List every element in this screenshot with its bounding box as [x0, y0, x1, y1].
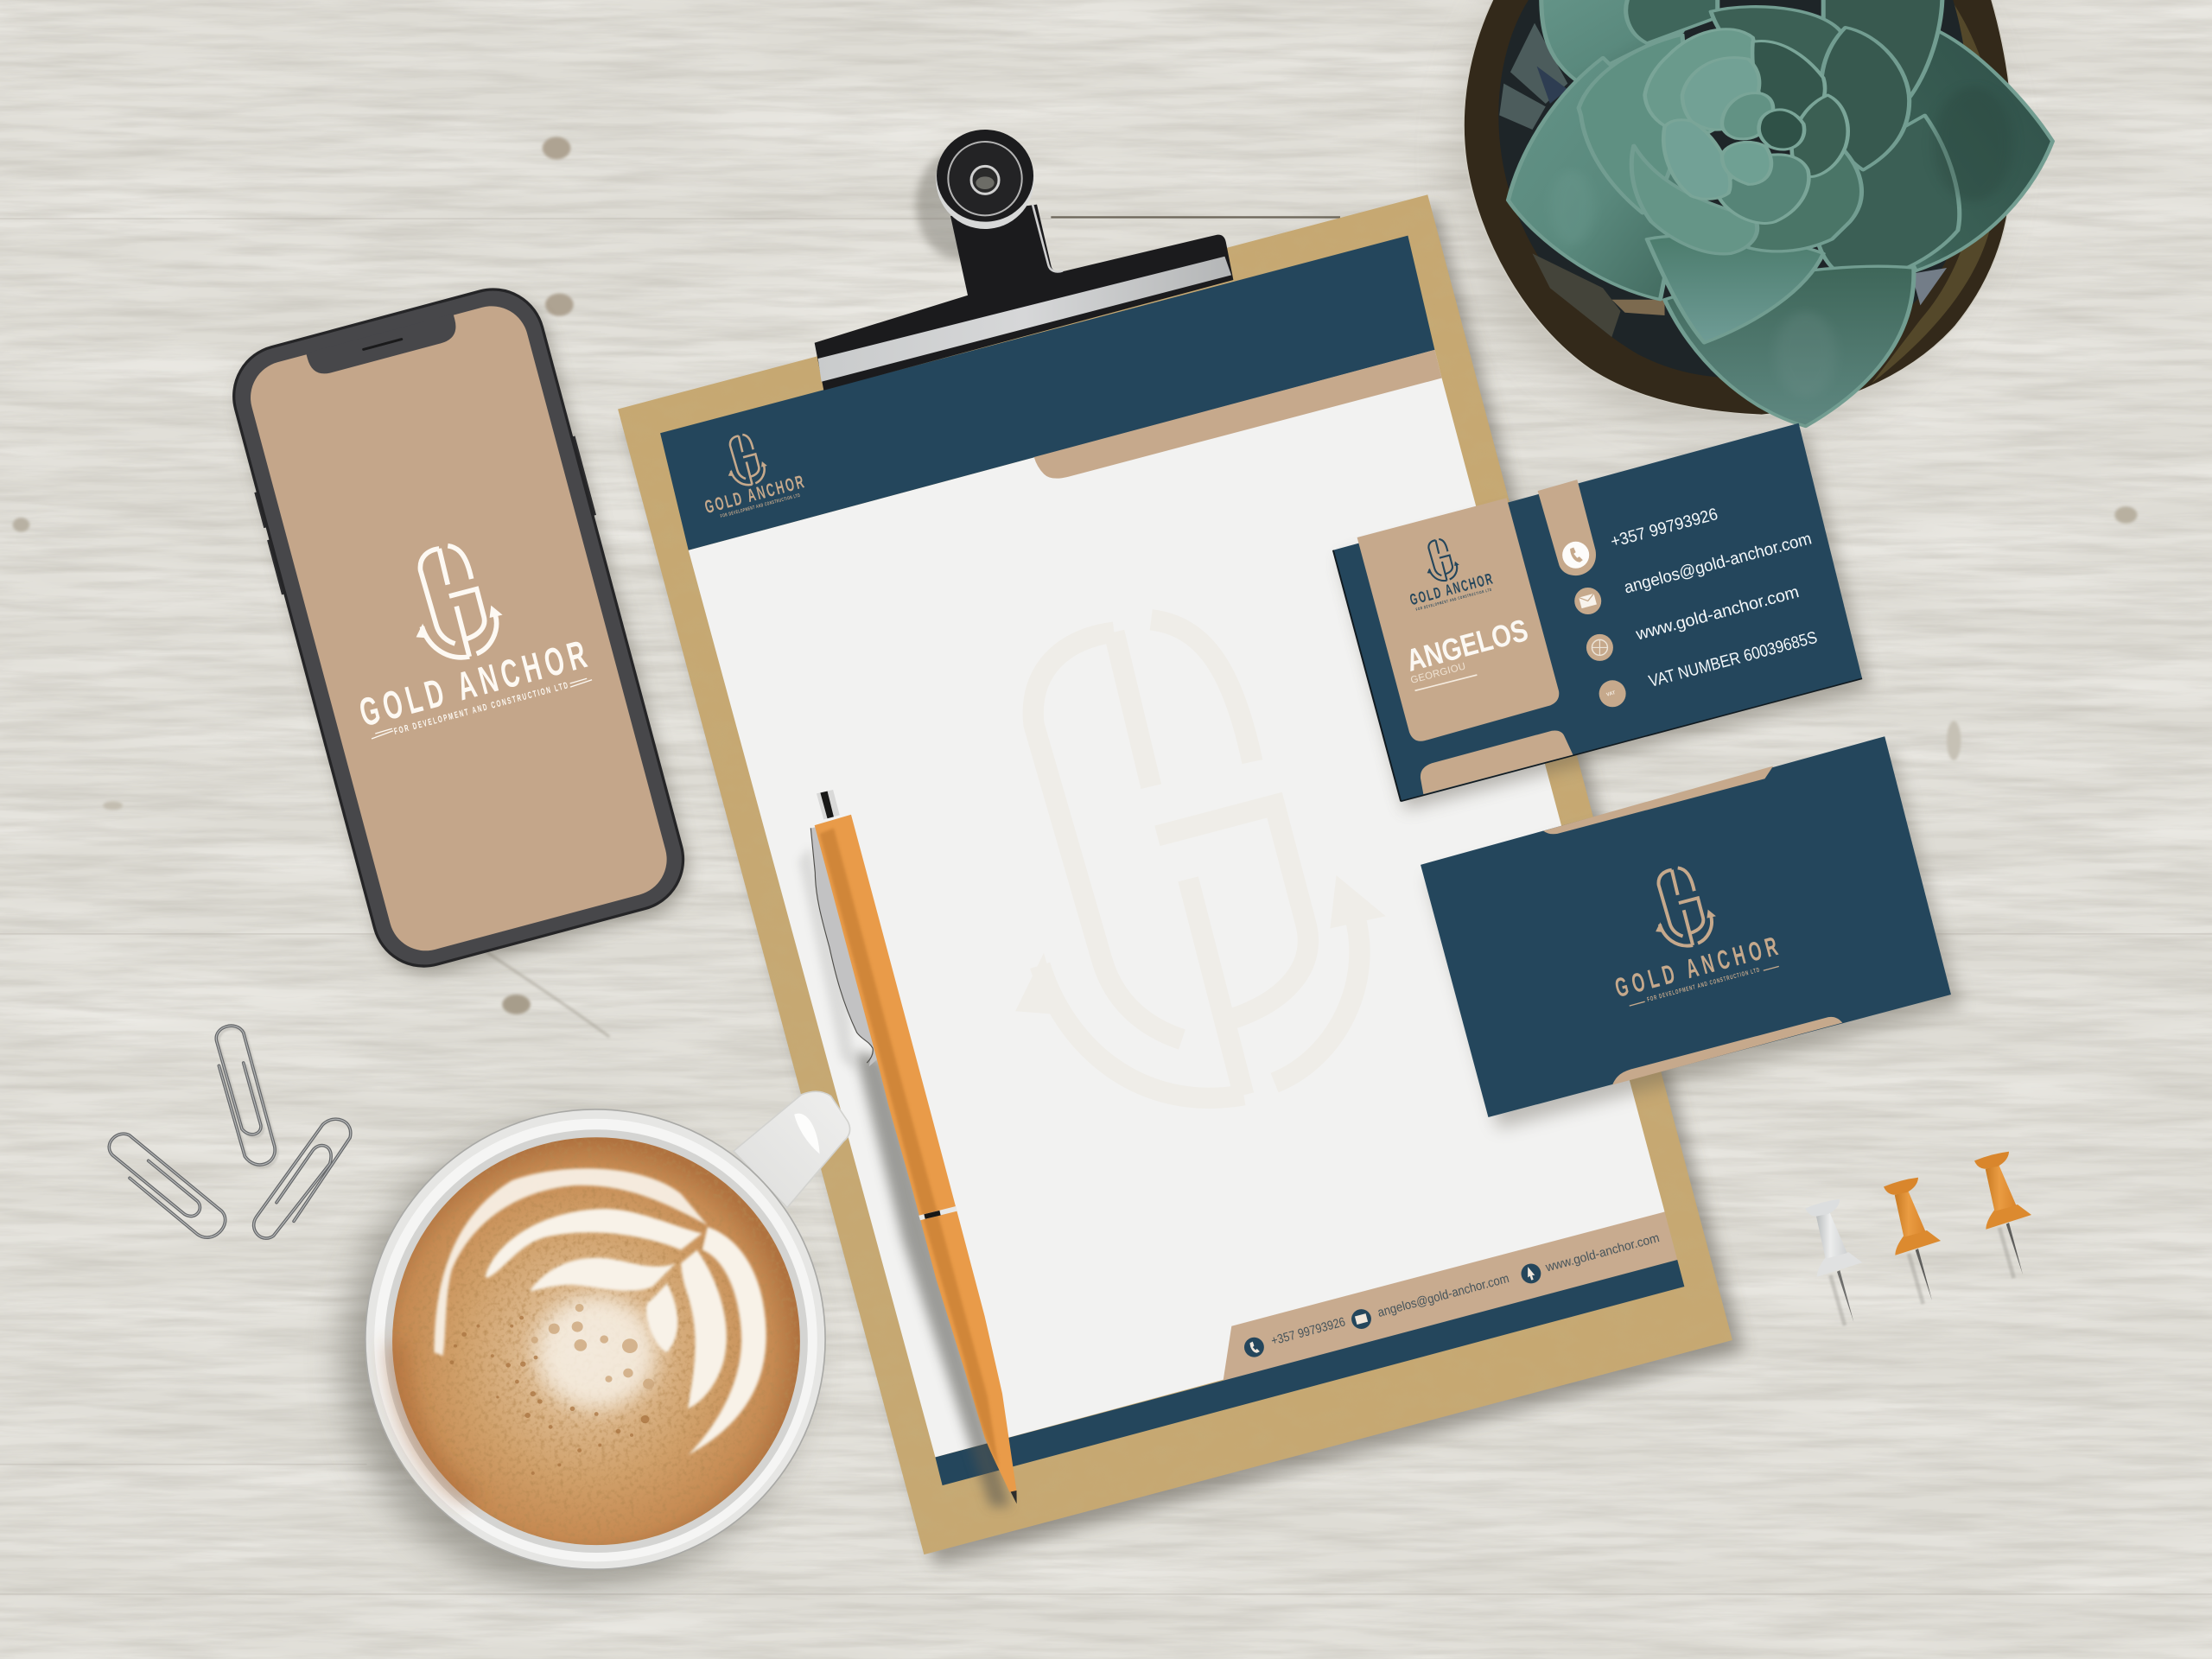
pen band: [918, 1206, 957, 1220]
letterhead paper: [689, 350, 1665, 1458]
push pins: [1805, 1152, 2031, 1325]
letterhead navy footer: [935, 1260, 1684, 1485]
coffee cup: [344, 1091, 850, 1588]
contact details: angelos@gold-anchor.com: [1622, 529, 1814, 598]
contact details: VAT NUMBER 60039685S: [1647, 628, 1819, 691]
name: ANGELOS: [1402, 612, 1532, 678]
coffee surface: [392, 1137, 800, 1545]
white pin: [1805, 1199, 1862, 1325]
card back base: [1421, 736, 1951, 1117]
binder clip: [815, 130, 1233, 391]
footer contacts: +357 99793926: [1270, 1315, 1347, 1349]
letterhead logo: FOR DEVELOPMENT AND CONSTRUCTION LTD: [720, 493, 801, 518]
letterhead tan accent: [1034, 350, 1442, 479]
business card front: [1333, 423, 1871, 810]
letterhead sheet: [660, 236, 1684, 1485]
card logo: [1408, 539, 1495, 612]
card back logo: GOLD ANCHOR: [1612, 932, 1781, 1003]
pen tip: [1011, 1491, 1017, 1503]
plant pot with succulent: [1453, 0, 2053, 430]
contact icons: VAT: [1606, 690, 1617, 698]
orange pin middle: [1884, 1178, 1941, 1304]
contact icons: [1562, 542, 1626, 707]
card back logo: [1612, 868, 1781, 1006]
paper clip right: [254, 1119, 351, 1238]
pen push button: [817, 790, 840, 819]
watermark logo: [1015, 620, 1386, 1098]
footer contacts: [1244, 1231, 1661, 1357]
paper clip top: [216, 1026, 277, 1167]
tan lower tab: [1421, 730, 1573, 794]
card back logo: FOR DEVELOPMENT AND CONSTRUCTION LTD: [1647, 968, 1761, 1004]
pen body: [815, 815, 1017, 1492]
letterhead tan footer: [1224, 1211, 1677, 1381]
card back top tan notch: [1543, 766, 1773, 834]
cup handle: [734, 1091, 850, 1208]
orange pin right: [1974, 1152, 2031, 1278]
cup rim: [365, 1109, 825, 1569]
card base: [1333, 423, 1862, 801]
clipboard: [618, 194, 1744, 1566]
card logo: GOLD ANCHOR: [1408, 571, 1495, 609]
pen dark side: [820, 828, 999, 1467]
letterhead navy header: [660, 236, 1434, 550]
footer contacts: www.gold-anchor.com: [1543, 1231, 1661, 1275]
card logo: FOR DEVELOPMENT AND CONSTRUCTION LTD: [1415, 588, 1492, 612]
business card back: [1421, 736, 1961, 1128]
business card front: GEORGIOU: [1409, 661, 1466, 686]
contact details: +357 99793926: [1609, 505, 1720, 551]
footer contacts: angelos@gold-anchor.com: [1376, 1272, 1510, 1320]
pen shadow: [855, 1051, 1010, 1507]
phone tagline: FOR DEVELOPMENT AND CONSTRUCTION LTD: [393, 680, 569, 736]
letterhead logo: [702, 435, 806, 518]
paper clips: [109, 1026, 351, 1238]
contact details: [1609, 505, 1819, 691]
pen clip: [810, 827, 877, 1066]
paper clip left: [109, 1134, 226, 1237]
tan contact tab: [1538, 480, 1596, 575]
phone logo: [416, 546, 503, 658]
card back bottom tan notch: [1612, 1017, 1842, 1085]
succulent rosette: [1508, 0, 2053, 426]
phone wordmark: GOLD ANCHOR: [355, 633, 591, 735]
pen: [798, 790, 1017, 1507]
letterhead logo: GOLD ANCHOR: [702, 471, 806, 518]
latte art: [397, 1168, 766, 1498]
smartphone: [219, 277, 700, 985]
tan name panel: [1357, 498, 1559, 741]
contact details: www.gold-anchor.com: [1633, 582, 1801, 645]
